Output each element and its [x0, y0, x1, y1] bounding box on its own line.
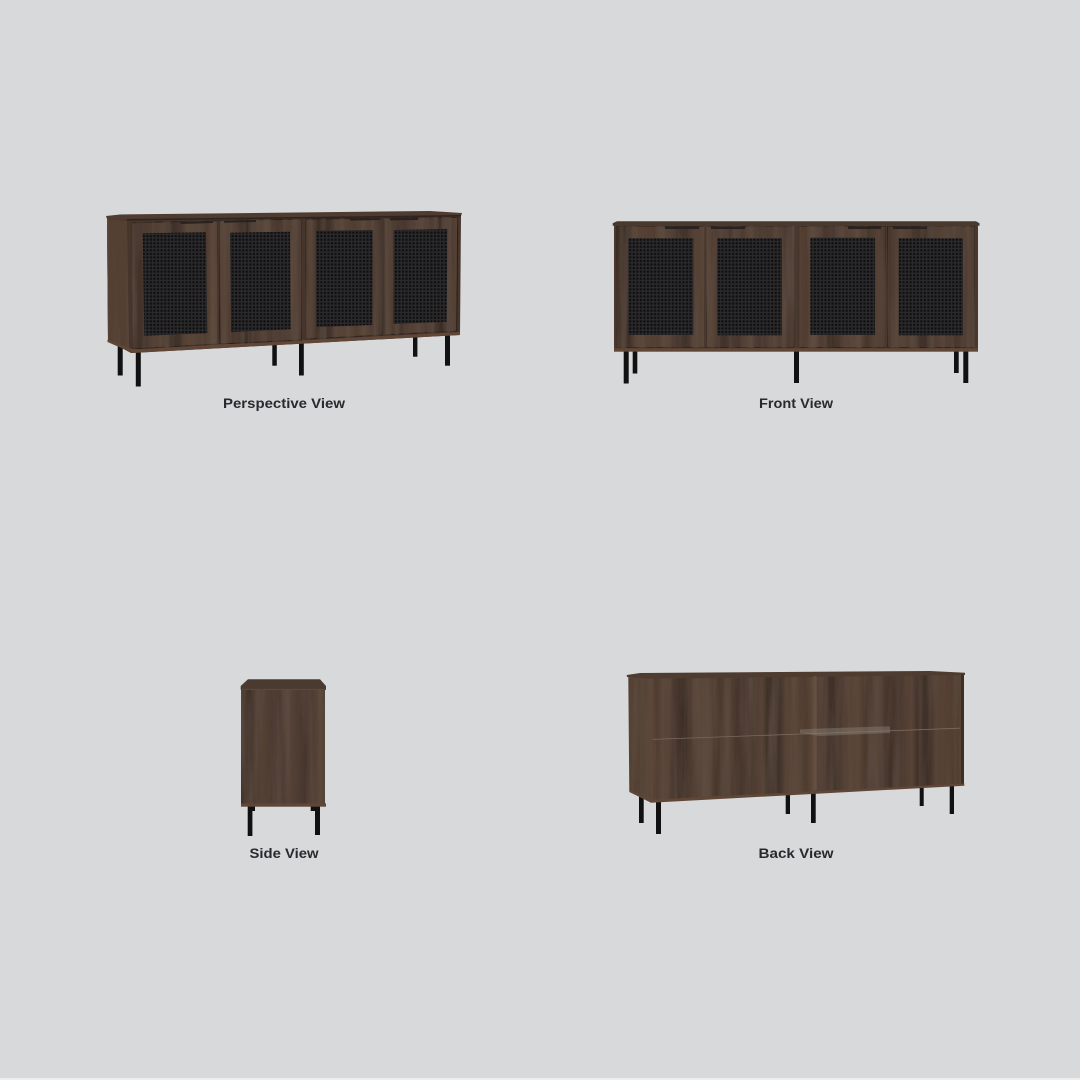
sideboard: front view — [613, 221, 980, 384]
door 2 — [706, 226, 794, 348]
carcass — [107, 214, 461, 353]
sideboard: perspective view — [106, 211, 462, 386]
door 3 — [799, 226, 886, 348]
legs — [639, 784, 954, 834]
bottom trim — [241, 803, 326, 807]
shelf line — [653, 728, 960, 740]
side panel — [107, 219, 129, 351]
sideboard: side view — [241, 679, 326, 836]
door 4 — [384, 217, 458, 335]
bottom trim — [108, 332, 460, 353]
legs — [624, 351, 968, 384]
side panel — [241, 689, 325, 804]
legs — [248, 806, 320, 836]
top slab — [241, 679, 326, 690]
back panel — [651, 674, 963, 800]
label: side view: Side View — [250, 845, 319, 861]
legs, rear and front — [118, 334, 450, 386]
sideboard: back view — [627, 671, 965, 834]
label: perspective view: Perspective View — [223, 395, 345, 411]
frame edges — [650, 678, 653, 800]
bottom edge strip — [0, 1078, 1080, 1080]
carcass — [614, 225, 978, 350]
door 1 — [617, 226, 705, 348]
bottom trim — [614, 348, 978, 352]
side panel — [628, 677, 651, 800]
top slab — [613, 221, 980, 226]
top slab — [627, 671, 965, 679]
label: back view: Back View — [758, 845, 834, 861]
door 1 — [132, 221, 218, 349]
center divider — [814, 676, 817, 790]
label: front view: Front View — [759, 395, 833, 411]
top slab — [106, 211, 462, 220]
door 4 — [887, 226, 975, 348]
door 3 — [306, 218, 383, 339]
bottom trim — [629, 784, 964, 803]
shelf glare — [800, 726, 890, 736]
door 2 — [219, 219, 302, 344]
